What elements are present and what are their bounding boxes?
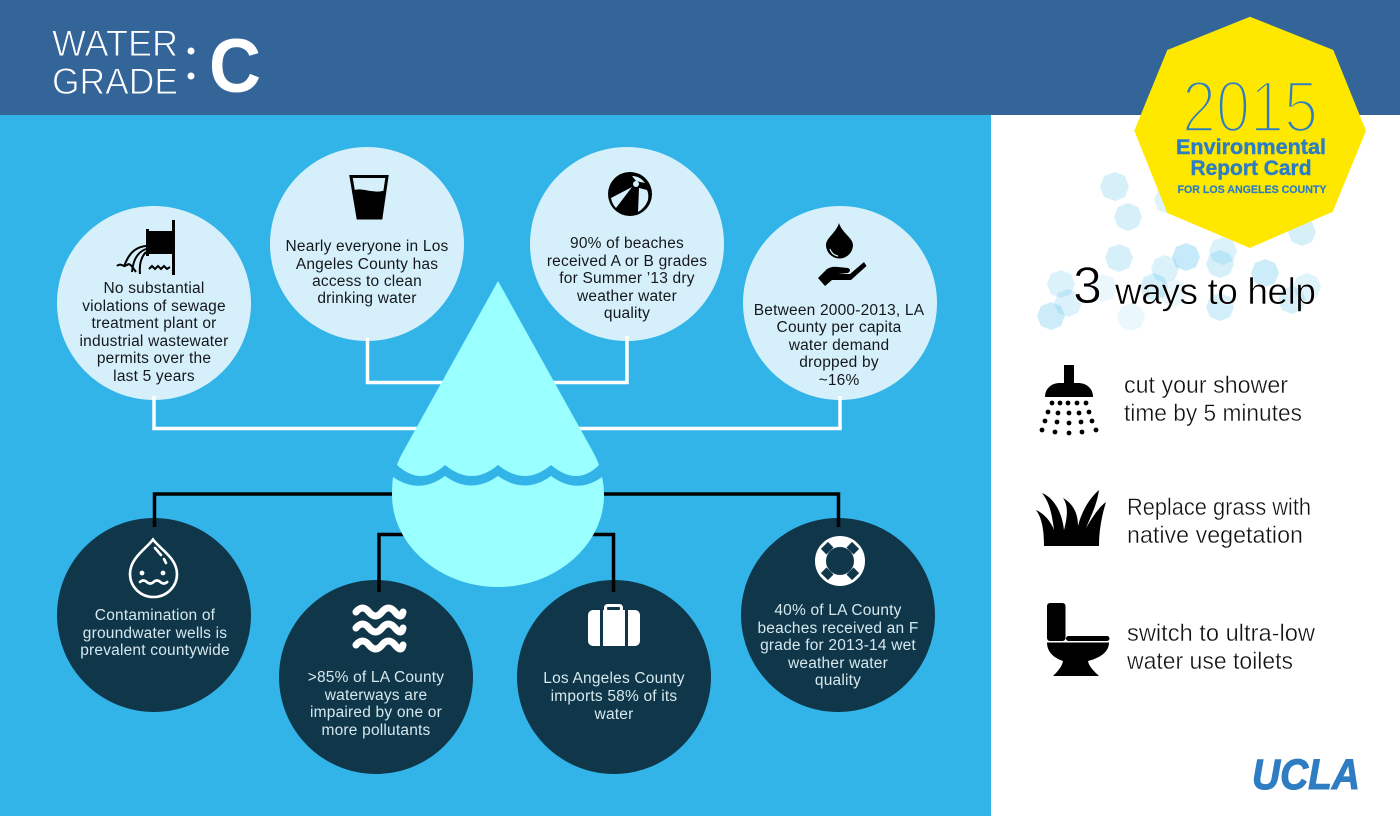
icon: suitcase [588, 604, 640, 646]
text: sewage: violations of sewage [82, 298, 226, 315]
panel: header band [0, 0, 1400, 115]
central water drop [392, 281, 604, 587]
icon: grass [1036, 490, 1106, 546]
text: wet weather beaches [757, 602, 919, 689]
circle: groundwater [57, 518, 251, 712]
text: beaches: for Summer ’13 dry [559, 270, 695, 287]
heading: 3 ways to help [1073, 257, 1316, 315]
text: sewage: No substantial [103, 280, 205, 297]
text: switch toilets: water use toilets [1126, 648, 1293, 675]
icon: contaminated drop [130, 540, 177, 597]
circle: wet weather beaches [741, 518, 935, 712]
text: imports: imports 58% of its [551, 688, 677, 705]
connector lines: black challenges [154, 494, 838, 592]
icon: waves [356, 608, 403, 649]
text: wet weather beaches: beaches received an F [757, 620, 919, 637]
text: cut your shower: time by 5 minutes [1124, 400, 1302, 427]
text: wet weather beaches: weather water [787, 655, 888, 672]
text: demand: Between 2000-2013, LA [754, 302, 925, 319]
text: replace grass [1127, 494, 1311, 549]
badge: 2015 environmental report card: Environmental [1176, 136, 1326, 159]
text: waterways: impaired by one or [310, 704, 442, 721]
text: groundwater [80, 607, 230, 659]
text: waterways: more pollutants [322, 722, 431, 739]
logo: UCLA: UCLA [1252, 751, 1360, 799]
text: demand: ~16% [819, 372, 859, 389]
circle: waterways [279, 580, 473, 774]
title: water grade C [52, 23, 261, 109]
circle: imports [517, 580, 711, 774]
circle: demand [743, 206, 937, 400]
text: demand [754, 302, 925, 389]
icon: shower [1040, 365, 1098, 435]
icon: drop in hand [818, 223, 866, 286]
text: cut your shower [1124, 372, 1302, 427]
text: sewage: last 5 years [113, 368, 195, 385]
text: beaches [547, 235, 707, 322]
circle: sewage [57, 206, 251, 400]
icon: beach ball [608, 172, 652, 216]
connector lines: white strengths [154, 336, 840, 428]
text: demand: County per capita [777, 319, 902, 336]
text: imports: Los Angeles County [543, 670, 685, 687]
badge: 2015 environmental report card: FOR LOS ANGELES COUNTY [1178, 184, 1327, 196]
text: imports: water [594, 706, 633, 723]
text: waterways [308, 669, 444, 739]
text: waterways: waterways are [324, 687, 427, 704]
text: beaches: quality [604, 305, 650, 322]
decorative bubbles [1037, 172, 1321, 331]
badge: 2015 environmental report card: Report Card [1190, 157, 1312, 180]
text: drinking water: access to clean [312, 273, 422, 290]
text: sewage: industrial wastewater [80, 333, 228, 350]
text: wet weather beaches: quality [815, 672, 861, 689]
text: drinking water: Nearly everyone in Los [286, 238, 449, 255]
text: groundwater: Contamination of [95, 607, 216, 624]
badge: 2015 environmental report card: 2015 [1182, 67, 1318, 148]
text: demand: dropped by [799, 354, 879, 371]
badge: 2015 environmental report card [1134, 17, 1366, 248]
text: drinking water [286, 238, 449, 307]
text: wet weather beaches: grade for 2013-14 wet [760, 637, 916, 654]
icon: toilet [1047, 603, 1110, 676]
text: sewage: permits over the [97, 350, 211, 367]
heading: 3 ways to help: ways to help [1114, 271, 1316, 312]
text: beaches: weather water [576, 288, 677, 305]
text: imports [543, 670, 685, 723]
text: groundwater: prevalent countywide [80, 642, 230, 659]
panel: main blue area [0, 115, 991, 816]
title: water grade C: GRADE [52, 61, 178, 102]
text: demand: water demand [788, 337, 889, 354]
text: wet weather beaches: 40% of LA County [774, 602, 902, 619]
text: groundwater: groundwater wells is [83, 625, 227, 642]
text: switch toilets [1126, 620, 1315, 675]
text: drinking water: drinking water [317, 290, 417, 307]
text: replace grass: native vegetation [1127, 522, 1303, 549]
text: replace grass: Replace grass with [1127, 494, 1311, 521]
text: cut your shower: cut your shower [1124, 372, 1288, 399]
text: sewage: treatment plant or [91, 315, 217, 332]
heading: 3 ways to help: 3 [1073, 257, 1102, 315]
text: beaches: 90% of beaches [570, 235, 684, 252]
icon: glass of water [351, 176, 387, 219]
title: water grade C: C [209, 24, 261, 109]
circle: drinking water [270, 147, 464, 341]
text: switch toilets: switch to ultra-low [1127, 620, 1315, 647]
text: drinking water: Angeles County has [296, 256, 438, 273]
text: waterways: >85% of LA County [308, 669, 444, 686]
text: sewage [80, 280, 228, 385]
icon: sewage pipe [117, 220, 175, 275]
text: beaches: received A or B grades [547, 253, 707, 270]
title: water grade C: WATER [52, 23, 178, 64]
icon: life ring [820, 542, 860, 580]
circle: beaches [530, 147, 724, 341]
